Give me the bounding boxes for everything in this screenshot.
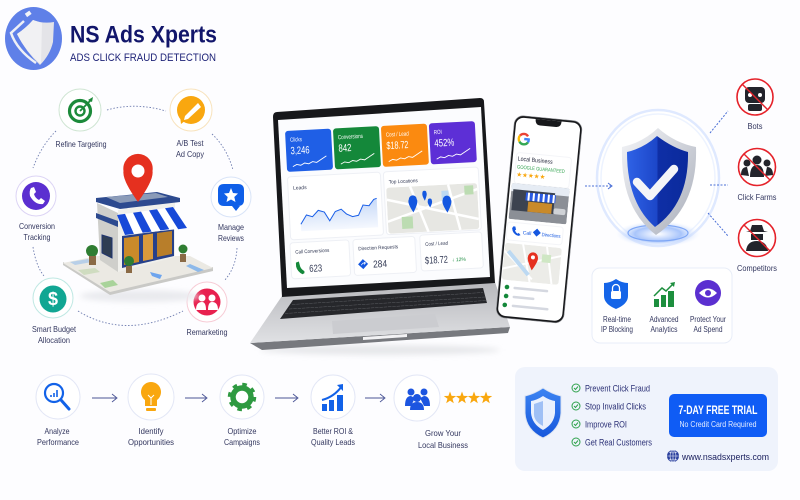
step: identify opportunities: Identify [138, 426, 164, 436]
item: conversion tracking: Conversion [19, 221, 55, 231]
step: identify opportunities: Opportunities [128, 437, 174, 447]
kpi: cost per lead: Cost / Lead [386, 132, 409, 139]
stat: cost per lead: ↓ 12% [452, 257, 467, 263]
step: identify opportunities [128, 374, 174, 447]
kpi: clicks: 3,246 [290, 144, 310, 157]
kpi: clicks [285, 129, 333, 172]
kpi: roi: ROI [434, 130, 442, 136]
stat: direction requests: 284 [373, 259, 388, 271]
laptop base [250, 282, 510, 355]
awning [117, 207, 187, 235]
stat: call conversions [290, 240, 351, 279]
arrow [92, 394, 117, 402]
call and directions: Directions [541, 232, 561, 240]
item: a/b test ad copy [170, 89, 212, 159]
benefits list: Prevent Click Fraud [585, 384, 650, 394]
leads chart [287, 172, 384, 240]
arrow [275, 394, 298, 402]
step: better roi: Quality Leads [311, 437, 355, 447]
map base [63, 256, 213, 302]
local marketing circle [16, 89, 251, 345]
step: grow your local business: Local Business [418, 440, 468, 450]
item: refine targeting: Refine Targeting [56, 139, 107, 149]
free trial button: 7-DAY FREE TRIAL [678, 405, 758, 417]
step: optimize campaigns [220, 375, 264, 447]
item: remarketing [186, 282, 228, 337]
laptop screen [278, 107, 490, 288]
step: analyze performance: Performance [37, 437, 79, 447]
location pin [123, 154, 153, 202]
kpi: cost per lead: $18.72 [386, 139, 409, 152]
cta shield [525, 388, 561, 438]
item: remarketing: Remarketing [186, 327, 228, 337]
threat: click farms: Click Farms [738, 192, 776, 202]
glow platform [616, 221, 700, 247]
threat: bots: Bots [748, 121, 762, 131]
laptop screen frame [273, 98, 495, 297]
item: smart budget allocation: Allocation [38, 335, 70, 345]
stat: direction requests [353, 236, 417, 276]
item: conversion tracking: Tracking [24, 232, 51, 242]
laptop [250, 98, 510, 355]
feature: ip blocking: IP Blocking [601, 324, 633, 334]
step: optimize campaigns: Optimize [228, 426, 257, 436]
feature: analytics: Advanced [650, 314, 679, 324]
shield [622, 128, 696, 235]
kpi: clicks: Clicks [290, 137, 302, 144]
stat: call conversions: Call Conversions [295, 248, 330, 256]
phone notch [535, 119, 562, 127]
threat: competitors [737, 220, 777, 273]
item: conversion tracking [16, 176, 56, 242]
feature: analytics [650, 282, 679, 334]
check mark [637, 169, 674, 196]
dashboard [284, 121, 483, 279]
feature: ad spend [690, 280, 726, 334]
step: optimize campaigns: Campaigns [224, 437, 260, 447]
arrow [365, 394, 385, 402]
stat: call conversions: 623 [309, 263, 323, 275]
phone [496, 115, 583, 324]
item: manage reviews [211, 177, 251, 243]
storefront on map [63, 154, 213, 302]
stat: cost per lead [420, 232, 483, 271]
item: smart budget allocation: Smart Budget [32, 324, 77, 334]
store photo [509, 183, 570, 224]
kpi: roi: 452% [434, 137, 455, 150]
feature: ip blocking: Real-time [603, 314, 631, 324]
threat: click farms [738, 148, 776, 202]
kpi: conversions: 842 [338, 142, 352, 155]
feature: ad spend: Protect Your [690, 314, 726, 324]
tagline: ADS CLICK FRAUD DETECTION [70, 52, 216, 64]
business card: GOOGLE GUARANTEED [517, 164, 565, 175]
step: grow your local business: Grow Your [425, 428, 461, 438]
feature: analytics: Analytics [650, 324, 678, 334]
top locations map: Top Locations [389, 178, 418, 186]
item: a/b test ad copy: A/B Test [176, 138, 204, 148]
item: refine targeting [56, 89, 107, 149]
feature: ad spend: Ad Spend [694, 324, 723, 334]
step: better roi: Better ROI & [313, 426, 353, 436]
business card [514, 152, 572, 188]
protection shield [597, 110, 719, 247]
brand name: NS Ads Xperts [70, 22, 217, 48]
logo shield [11, 11, 54, 65]
free trial button: No Credit Card Required [680, 420, 756, 429]
business card: ★★★★★ [516, 170, 546, 181]
step: analyze performance [36, 375, 80, 447]
threat: competitors: Competitors [737, 263, 777, 273]
halo [597, 110, 719, 246]
benefits list: Get Real Customers [585, 438, 652, 448]
stat: cost per lead: Cost / Lead [425, 241, 448, 248]
benefits list: Stop Invalid Clicks [585, 402, 646, 412]
plants [86, 244, 188, 273]
phone map [502, 243, 562, 285]
kpi: cost per lead [381, 124, 429, 167]
phone body [496, 115, 583, 324]
free trial button [669, 394, 767, 437]
business card: Local Business [517, 156, 553, 166]
item: smart budget allocation [32, 278, 77, 345]
kpi: roi [429, 121, 477, 164]
step: analyze performance: Analyze [44, 426, 70, 436]
checklist [502, 284, 550, 311]
website [667, 450, 769, 463]
logo badge [5, 7, 62, 70]
step: grow your local business [394, 375, 468, 450]
stat: direction requests: Direction Requests [358, 244, 399, 252]
benefits list: Improve ROI [585, 420, 627, 430]
panel: call to action [515, 367, 778, 471]
flow arrows [585, 111, 728, 236]
call and directions [506, 222, 563, 245]
leads chart: Leads [293, 185, 307, 192]
benefits list [572, 384, 652, 448]
website: www.nsadsxperts.com [681, 452, 769, 463]
step: better roi [311, 375, 355, 447]
panel: features [592, 268, 732, 343]
stat: cost per lead: $18.72 [425, 255, 449, 267]
item: manage reviews: Manage [218, 222, 244, 232]
top locations map [383, 167, 481, 235]
kpi: conversions: Conversions [338, 134, 363, 141]
process flow [36, 374, 492, 450]
rating stars [444, 392, 492, 403]
phone screen [498, 117, 581, 321]
call and directions: Call [522, 230, 532, 237]
kpi: conversions [333, 126, 381, 169]
item: smart budget allocation: $ [48, 289, 58, 309]
threat: bots [737, 79, 773, 131]
logo [5, 7, 217, 70]
item: a/b test ad copy: Ad Copy [176, 149, 205, 159]
arrow [185, 394, 207, 402]
google g logo [518, 133, 529, 145]
feature: ip blocking [601, 279, 633, 334]
item: manage reviews: Reviews [218, 233, 244, 243]
dotted connectors [33, 106, 237, 326]
building [96, 192, 180, 272]
